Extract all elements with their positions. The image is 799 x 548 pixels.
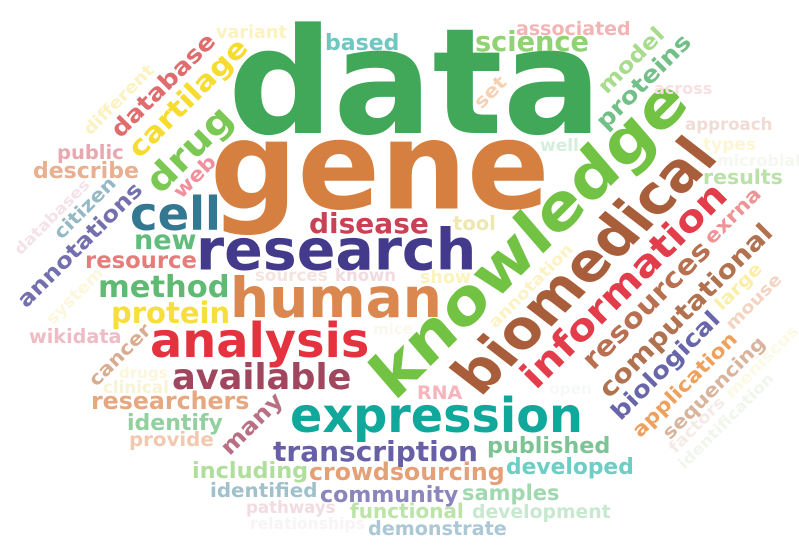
word: across: across — [654, 79, 712, 98]
word: human: human — [230, 266, 442, 330]
word: identify: identify — [127, 411, 223, 436]
word: known: known — [335, 266, 396, 285]
word: development: development — [472, 502, 611, 523]
word: well: well — [540, 136, 579, 156]
word: citizen: citizen — [49, 172, 120, 243]
word: many: many — [215, 387, 289, 460]
word: annotation: annotation — [485, 240, 577, 332]
word: relationships: relationships — [250, 515, 365, 533]
word: open: open — [549, 380, 592, 398]
word: analysis: analysis — [150, 314, 369, 369]
word: science: science — [475, 27, 589, 58]
word: large: large — [711, 259, 767, 315]
word: mouse: mouse — [722, 270, 786, 334]
word: drugs: drugs — [119, 364, 168, 382]
word: samples: samples — [462, 481, 560, 505]
word: proteins: proteins — [590, 28, 697, 135]
word: knowledge: knowledge — [357, 62, 701, 414]
word: information: information — [512, 174, 736, 397]
word: resource: resource — [85, 248, 197, 274]
word: identified: identified — [210, 479, 318, 502]
word: developed: developed — [506, 455, 634, 480]
word: based: based — [325, 31, 399, 56]
word: cancer: cancer — [84, 319, 156, 391]
word: crowdsourcing: crowdsourcing — [309, 458, 505, 486]
word: cartilage: cartilage — [121, 31, 254, 164]
word: clinical: clinical — [103, 377, 169, 397]
word: resources: resources — [575, 234, 717, 376]
word: pathways: pathways — [246, 498, 336, 517]
word: databases: databases — [11, 176, 93, 258]
word: identification: identification — [674, 369, 777, 472]
word: researchers: researchers — [91, 387, 249, 415]
word: research: research — [196, 218, 476, 284]
word: available: available — [172, 357, 351, 398]
word: including: including — [192, 458, 308, 484]
word: new: new — [134, 225, 196, 256]
word: method: method — [98, 270, 230, 305]
word: demonstrate: demonstrate — [368, 517, 507, 540]
word: data: data — [228, 0, 602, 168]
word: web: web — [169, 150, 221, 203]
word: biological: biological — [605, 305, 725, 425]
word: biomedical: biomedical — [438, 126, 731, 407]
word: wikidata: wikidata — [29, 325, 121, 348]
word: transcription: transcription — [273, 435, 478, 468]
word: variant: variant — [216, 23, 287, 43]
word: associated: associated — [516, 18, 631, 40]
word: sequencing: sequencing — [657, 331, 770, 444]
word: tool: tool — [453, 212, 496, 235]
word: community: community — [320, 482, 458, 508]
word: RNA: RNA — [417, 382, 463, 404]
word: cell: cell — [130, 187, 221, 241]
word: show: show — [420, 268, 471, 288]
word: application: application — [627, 327, 742, 442]
word: drug: drug — [137, 97, 241, 201]
word: microbial: microbial — [717, 151, 799, 170]
word: database: database — [105, 27, 221, 143]
word: protein: protein — [111, 296, 230, 330]
word: set: set — [469, 71, 511, 113]
word: expression: expression — [290, 389, 583, 444]
word: public: public — [57, 141, 124, 164]
word: computational: computational — [593, 218, 779, 404]
word: disease: disease — [309, 207, 429, 240]
word: model: model — [593, 22, 670, 99]
word: mice: mice — [373, 320, 413, 338]
word: exrna: exrna — [700, 183, 766, 249]
word: sources: sources — [255, 265, 328, 285]
word: gene: gene — [210, 96, 550, 238]
word: functional: functional — [350, 499, 464, 523]
word: describe: describe — [33, 159, 139, 184]
word: factors: factors — [665, 393, 729, 457]
word: types: types — [703, 135, 756, 155]
word: system: system — [43, 264, 108, 329]
word: provide: provide — [129, 428, 214, 451]
word: approach: approach — [685, 115, 772, 134]
word: published: published — [487, 433, 610, 459]
word: different: different — [80, 61, 158, 139]
word: results: results — [703, 165, 783, 189]
word: annotations: annotations — [12, 177, 148, 313]
